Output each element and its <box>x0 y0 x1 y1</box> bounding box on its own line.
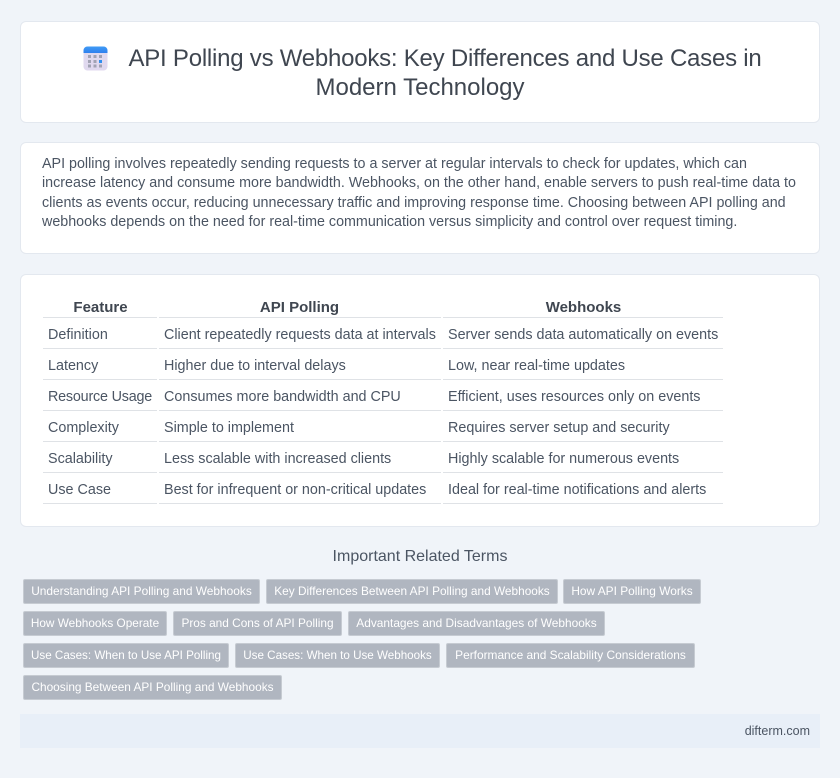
tag: Understanding API Polling and Webhooks <box>31 584 252 598</box>
tag: How API Polling Works <box>571 584 693 598</box>
text block: intro: increase latency and consume more bandwidth. Webhooks, on the other hand, enable servers to push real-time data to <box>42 175 796 191</box>
tag <box>266 579 558 604</box>
tag: How Webhooks Operate <box>31 616 159 630</box>
row: Latency: Low, near real-time updates <box>448 358 625 374</box>
row: Complexity: Simple to implement <box>164 420 294 436</box>
row: Scalability <box>48 451 679 467</box>
tag: Pros and Cons of API Polling <box>181 616 334 630</box>
panel: comparison table <box>20 274 820 527</box>
panel: intro paragraph <box>20 142 820 254</box>
table header: Feature: Feature <box>73 299 128 316</box>
title <box>128 45 762 101</box>
text block: intro: webhooks depends on the need for real-time communication versus simplicity and control over request timing. <box>42 214 737 230</box>
row: Definition <box>48 327 718 343</box>
text block: intro <box>42 156 796 230</box>
tag: Choosing Between API Polling and Webhooks <box>31 680 274 694</box>
tag <box>23 611 167 636</box>
row: Latency: Latency <box>48 358 98 374</box>
row: Scalability: Scalability <box>48 451 113 467</box>
row: Use Case <box>48 482 706 498</box>
title: API Polling vs Webhooks: Key Differences and Use Cases in <box>128 45 762 72</box>
table header: API Polling: API Polling <box>260 299 339 316</box>
row: Use Case: Best for infrequent or non-critical updates <box>164 482 426 498</box>
row: Latency <box>48 358 625 374</box>
tag <box>23 579 260 604</box>
tag <box>235 643 440 668</box>
row: Definition: Definition <box>48 327 108 343</box>
footer bar <box>20 714 820 748</box>
row: Scalability: Highly scalable for numerous events <box>448 451 679 467</box>
tag: Performance and Scalability Considerations <box>455 648 686 662</box>
table header: Webhooks: Webhooks <box>546 299 621 316</box>
tag <box>173 611 342 636</box>
row: Use Case: Use Case <box>48 482 111 498</box>
tag: Use Cases: When to Use API Polling <box>31 649 221 662</box>
row: Complexity <box>48 420 670 436</box>
row: Scalability: Less scalable with increased clients <box>164 451 391 467</box>
footer text: source: difterm.com <box>745 724 810 738</box>
row: Resource Usage: Efficient, uses resources only on events <box>448 389 700 405</box>
text block: intro: API polling involves repeatedly sending requests to a server at regular intervals to check for updates, which can <box>42 156 747 172</box>
icon: calendar app <box>84 46 108 70</box>
row: Resource Usage: Consumes more bandwidth and CPU <box>164 389 401 405</box>
title: Modern Technology <box>315 74 525 101</box>
row: Resource Usage: Resource Usage <box>48 389 152 405</box>
row: Complexity: Requires server setup and security <box>448 420 670 436</box>
tag group: related terms <box>23 579 701 700</box>
tag: Key Differences Between API Polling and Webhooks <box>274 584 550 598</box>
row: Definition: Server sends data automatically on events <box>448 327 718 343</box>
row: Use Case: Ideal for real-time notifications and alerts <box>448 482 706 498</box>
tag <box>446 643 695 668</box>
tag <box>563 579 701 604</box>
heading: related terms: Important Related Terms <box>333 548 507 565</box>
panel: title header <box>20 21 820 123</box>
text block: intro: clients as events occur, reducing unnecessary traffic and improving response time. Choosing between API polling and <box>42 194 786 210</box>
row: Definition: Client repeatedly requests data at intervals <box>164 327 436 343</box>
tag: Use Cases: When to Use Webhooks <box>243 649 432 662</box>
row: Latency: Higher due to interval delays <box>164 358 346 374</box>
tag <box>348 611 605 636</box>
tag <box>23 643 229 668</box>
row: Complexity: Complexity <box>48 420 119 436</box>
tag: Advantages and Disadvantages of Webhooks <box>356 616 597 630</box>
row: Resource Usage <box>48 389 700 405</box>
tag <box>23 675 282 700</box>
